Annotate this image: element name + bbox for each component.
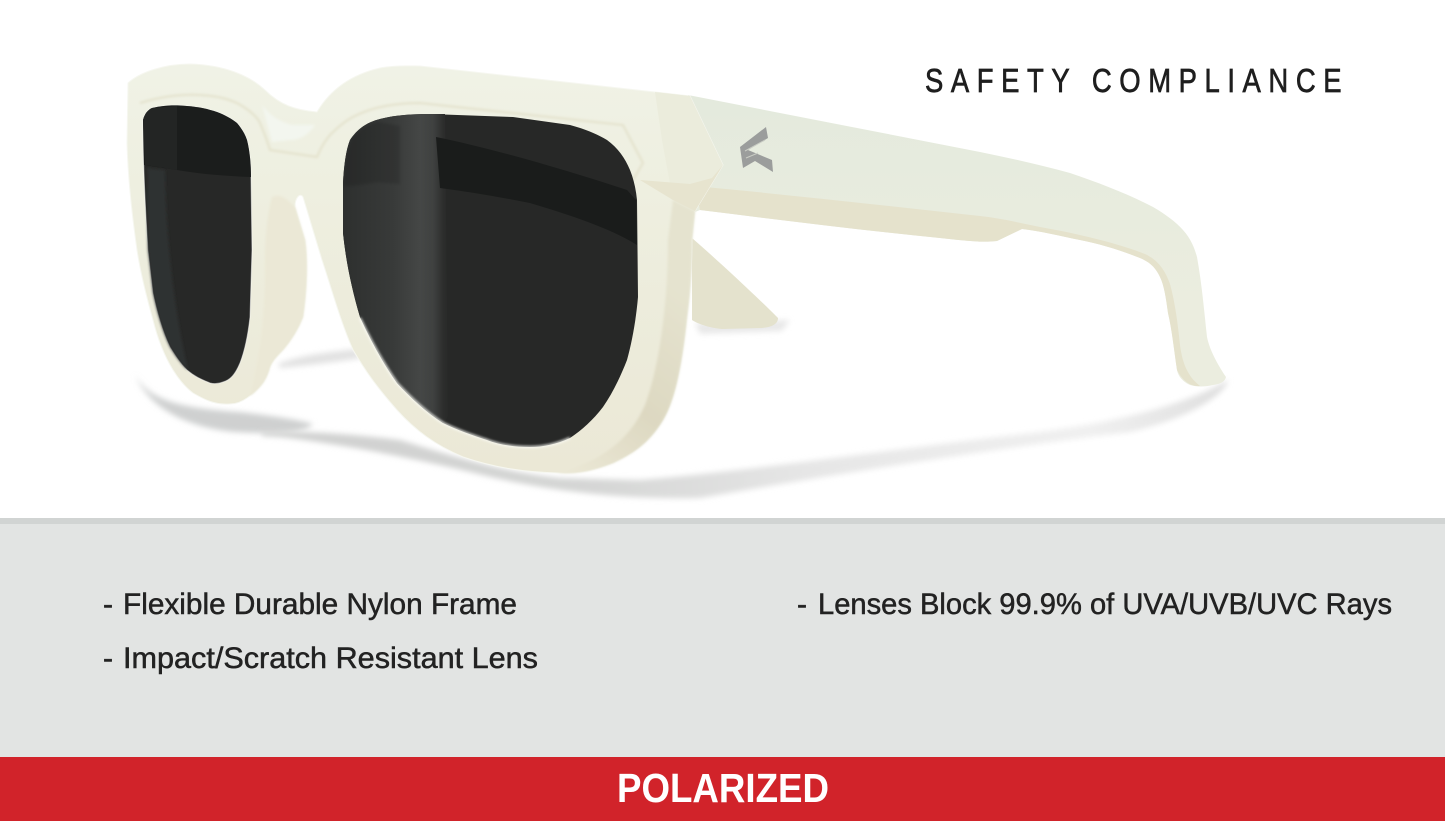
feature: UV protection: Lenses Block 99.9% of UVA/UVB/UVC Rays bbox=[818, 588, 1392, 621]
right lens bbox=[343, 114, 638, 447]
sunglasses illustration bbox=[127, 64, 1226, 473]
bridge highlight bbox=[262, 105, 315, 142]
feature: UV protection: - bbox=[797, 588, 807, 621]
lens lower edge highlight bbox=[360, 318, 570, 447]
panel: features bbox=[0, 524, 1445, 757]
divider strip bbox=[0, 518, 1445, 524]
lens reflection shade bbox=[344, 122, 400, 186]
near temple arm bbox=[688, 95, 1226, 386]
ground shadow of glasses bbox=[135, 320, 1228, 498]
feature: impact resistant lens: - bbox=[103, 642, 113, 675]
front frame corner facet bbox=[655, 92, 723, 211]
temple logo mark bbox=[740, 127, 773, 172]
nose pad shading bbox=[250, 196, 307, 396]
feature: nylon frame: - bbox=[103, 588, 113, 621]
feature: nylon frame: Flexible Durable Nylon Frame bbox=[123, 588, 517, 621]
heading: safety compliance: SAFETY COMPLIANCE bbox=[925, 62, 1342, 100]
lens left haze bbox=[343, 114, 448, 423]
far temple arm bbox=[692, 238, 778, 329]
front frame inner bevel bbox=[140, 95, 643, 180]
front frame bbox=[127, 64, 723, 473]
left lens bbox=[143, 105, 252, 384]
frame right-side shading bbox=[557, 200, 695, 473]
temple lower bevel bbox=[695, 186, 1200, 386]
banner label: POLARIZED bbox=[617, 765, 829, 811]
lens upper dark band bbox=[436, 137, 637, 245]
banner: polarized bbox=[0, 757, 1445, 821]
feature: impact resistant lens: Impact/Scratch Resistant Lens bbox=[123, 642, 538, 675]
